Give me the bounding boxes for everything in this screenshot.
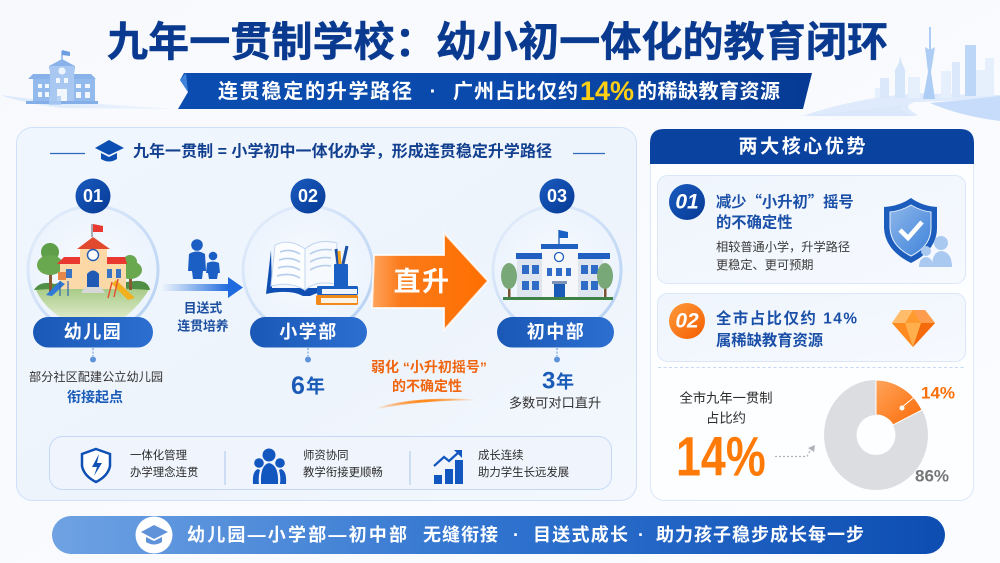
panel header: 两大核心优势 [738,134,866,158]
feature: continued growth [434,448,569,484]
duration and note: 多数可对口直升 [509,394,601,410]
panel heading: 九年一贯制 = 小学初中一体化办学，形成连贯稳定升学路径 [133,142,552,160]
icon: kindergarten scene [34,224,150,317]
bubble ring [243,206,373,334]
advantage card 1: 相较普通小学，升学路径 [716,239,850,254]
arrow: guided progression: 连贯培养 [177,318,229,334]
stage 3: junior high [493,178,621,410]
duration [291,372,325,400]
footer banner: 幼儿园—小学部—初中部 [187,524,407,545]
icon: shield with people [884,198,952,267]
duration and note [509,368,601,410]
stage description: 部分社区配建公立幼儿园 [29,369,163,384]
advantage card 1: 更稳定、更可预期 [716,257,814,272]
step number: 02 [298,186,318,206]
icon: city skyline top right [800,27,1000,121]
step number [76,178,110,214]
arrow: guided progression: 目送式 [184,300,222,316]
stage label [33,317,153,348]
subtitle ribbon: 的稀缺教育资源 [637,79,780,103]
footer banner: 助力孩子稳步成长每一步 [656,524,864,545]
donut chart: 14% [921,384,955,402]
feature: teacher collaboration [253,448,383,484]
stage 2: primary school [243,178,373,400]
panel: two core advantages [650,129,974,500]
footer banner: 无缝衔接 [423,525,498,545]
bubble ring [493,206,621,334]
icon: open book and pencils [266,241,358,305]
callout: weakens lottery uncertainty: 的不确定性 [392,378,462,394]
step number [290,178,326,214]
share summary: 14% [676,425,766,487]
icon: school illustration top left [0,50,175,109]
duration: 年 [306,374,325,398]
feature: continued growth: 助力学生长远发展 [478,465,569,479]
advantage card 1: 减少“小升初”摇号 [716,190,854,212]
duration: 6 [291,372,305,400]
bubble ring [28,206,158,334]
advantage card 2: 02 [675,310,699,332]
feature: teacher collaboration: 教学衔接更顺畅 [303,465,383,479]
feature: integrated management: 一体化管理 [130,448,188,462]
arrow: guided progression [161,239,243,334]
title: 九年一贯制学校：幼小初一体化的教育闭环 [107,19,888,65]
stage description: 衔接起点 [67,389,123,405]
duration and note: 年 [556,371,574,392]
feature: teacher collaboration: 师资协同 [303,448,349,462]
callout: weakens lottery uncertainty [371,359,487,409]
advantage card 2 [658,294,966,362]
icon: graduation cap [136,516,172,554]
feature: continued growth: 成长连续 [478,448,524,462]
panel heading [50,140,605,162]
footer banner: · [638,525,644,545]
arrow: direct promotion [372,233,488,330]
step number: 01 [83,186,103,206]
stage label: 幼儿园 [64,322,122,342]
stage description [29,369,163,405]
subtitle ribbon [178,73,812,109]
footer banner: 目送式成长 [533,524,628,545]
callout: weakens lottery uncertainty: 弱化 “小升初摇号” [371,359,487,375]
subtitle ribbon: 连贯稳定的升学路径 [218,79,412,103]
stage label [250,317,367,348]
donut chart: 86% [915,466,949,486]
subtitle ribbon: 广州占比仅约 [453,80,578,103]
share summary [676,390,773,487]
share summary: 占比约 [706,410,746,426]
share summary: 全市九年一贯制 [679,390,773,406]
icon: parent and child [188,239,220,279]
donut chart [824,380,955,490]
subtitle ribbon: 14% [580,76,634,106]
stage 1: kindergarten [28,178,163,405]
stage label [497,317,614,348]
advantage card 1: 的不确定性 [716,214,792,232]
advantage card 2: 全市占比仅约 14% [716,310,857,328]
icon: school building [501,230,613,300]
stage label: 小学部 [279,321,338,342]
step number [540,178,574,214]
arrow: to donut [775,445,815,456]
arrow: direct promotion: 直升 [394,267,450,297]
advantage card 2: 属稀缺教育资源 [716,332,824,350]
subtitle ribbon: · [430,81,436,103]
stage label: 初中部 [527,321,585,342]
panel header [650,129,974,164]
advantage card 1 [658,176,966,284]
footer banner: · [513,525,519,545]
duration and note: 3 [542,368,555,394]
advantage card 1: 01 [675,190,699,214]
icon: diamond [892,310,935,347]
feature: integrated management: 办学理念连贯 [130,465,198,479]
feature strip [50,436,612,490]
feature: integrated management [82,448,198,482]
step number: 03 [547,186,567,206]
footer banner [52,516,945,554]
panel: school path [16,128,636,500]
